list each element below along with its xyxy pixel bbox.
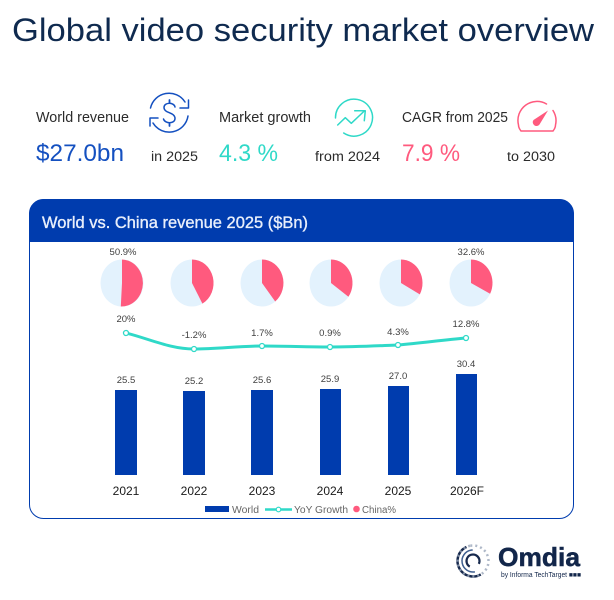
pie labels: 32.6%: [458, 247, 485, 258]
icon: growth trend: [335, 99, 372, 136]
bar chart: world revenue: 25.2: [185, 376, 203, 387]
stat: CAGR: 7.9 %: [402, 140, 460, 167]
panel header: [29, 199, 574, 242]
pie charts: China share: [100, 259, 493, 307]
stat: CAGR: to 2030: [507, 149, 555, 164]
logo: Omdia: by Informa TechTarget ■■■: [501, 572, 581, 579]
stat: world revenue: [36, 110, 198, 167]
stat: world revenue: World revenue: [36, 110, 129, 126]
bar chart: world revenue: 2026F: [450, 484, 484, 498]
bar chart: world revenue: 2024: [317, 484, 344, 498]
bar chart: world revenue: 2023: [249, 484, 276, 498]
stat: market growth: [219, 110, 381, 167]
stat: CAGR: [402, 110, 555, 167]
icon: dollar refresh: [150, 93, 188, 132]
pie labels: [110, 247, 485, 258]
stat: CAGR: CAGR from 2025: [402, 110, 508, 126]
bar chart: world revenue: 30.4: [457, 359, 475, 370]
line chart: YoY growth: 0.9%: [319, 328, 341, 339]
bar chart: world revenue: 25.6: [253, 375, 271, 386]
stat: market growth: Market growth: [219, 110, 311, 126]
logo: Omdia: Omdia: [498, 542, 581, 572]
line chart: YoY growth: 4.3%: [387, 327, 409, 338]
pie labels: 50.9%: [110, 247, 137, 258]
line chart: YoY growth: 12.8%: [453, 319, 480, 330]
legend: [205, 505, 396, 516]
panel: world vs China revenue: [29, 199, 574, 518]
stat: world revenue: in 2025: [151, 149, 198, 164]
line chart: YoY growth: 1.7%: [251, 328, 273, 339]
legend: China%: [362, 505, 396, 516]
bar chart: world revenue: 27.0: [389, 371, 407, 382]
bar chart: world revenue: 2021: [113, 484, 140, 498]
line chart: YoY growth: -1.2%: [182, 330, 207, 341]
stat: world revenue: $27.0bn: [36, 140, 124, 167]
bar chart: world revenue: 2022: [181, 484, 208, 498]
legend: YoY Growth: [294, 505, 348, 516]
bar chart: world revenue: [113, 359, 484, 498]
stat: market growth: from 2024: [315, 149, 381, 164]
icon: gauge: [518, 101, 556, 131]
line chart: YoY growth: [116, 314, 480, 352]
bar chart: world revenue: 25.9: [321, 374, 339, 385]
logo: Omdia: [452, 540, 581, 582]
panel heading: World vs. China revenue 2025 ($Bn): [42, 214, 308, 232]
line chart: YoY growth: 20%: [116, 314, 136, 325]
stat: market growth: 4.3 %: [219, 140, 278, 167]
title: Global video security market overview: [12, 12, 595, 48]
bar chart: world revenue: 25.5: [117, 375, 135, 386]
bar chart: world revenue: 2025: [385, 484, 412, 498]
legend: World: [232, 505, 259, 516]
